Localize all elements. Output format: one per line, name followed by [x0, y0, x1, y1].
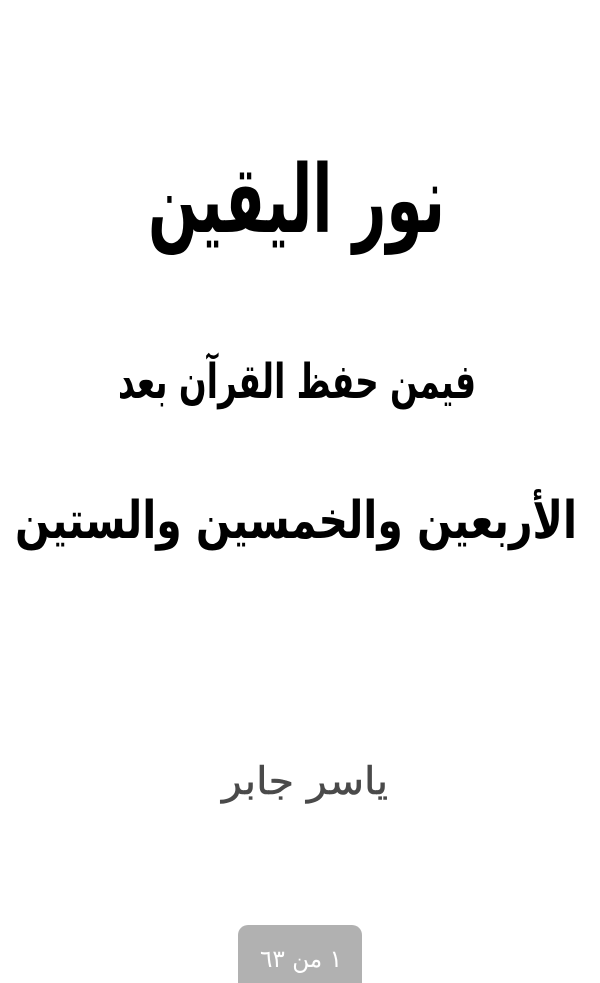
author name: ياسر جابر — [220, 759, 388, 804]
page indicator text: ١ من ٦٣ — [260, 945, 342, 973]
page indicator badge — [238, 925, 362, 983]
